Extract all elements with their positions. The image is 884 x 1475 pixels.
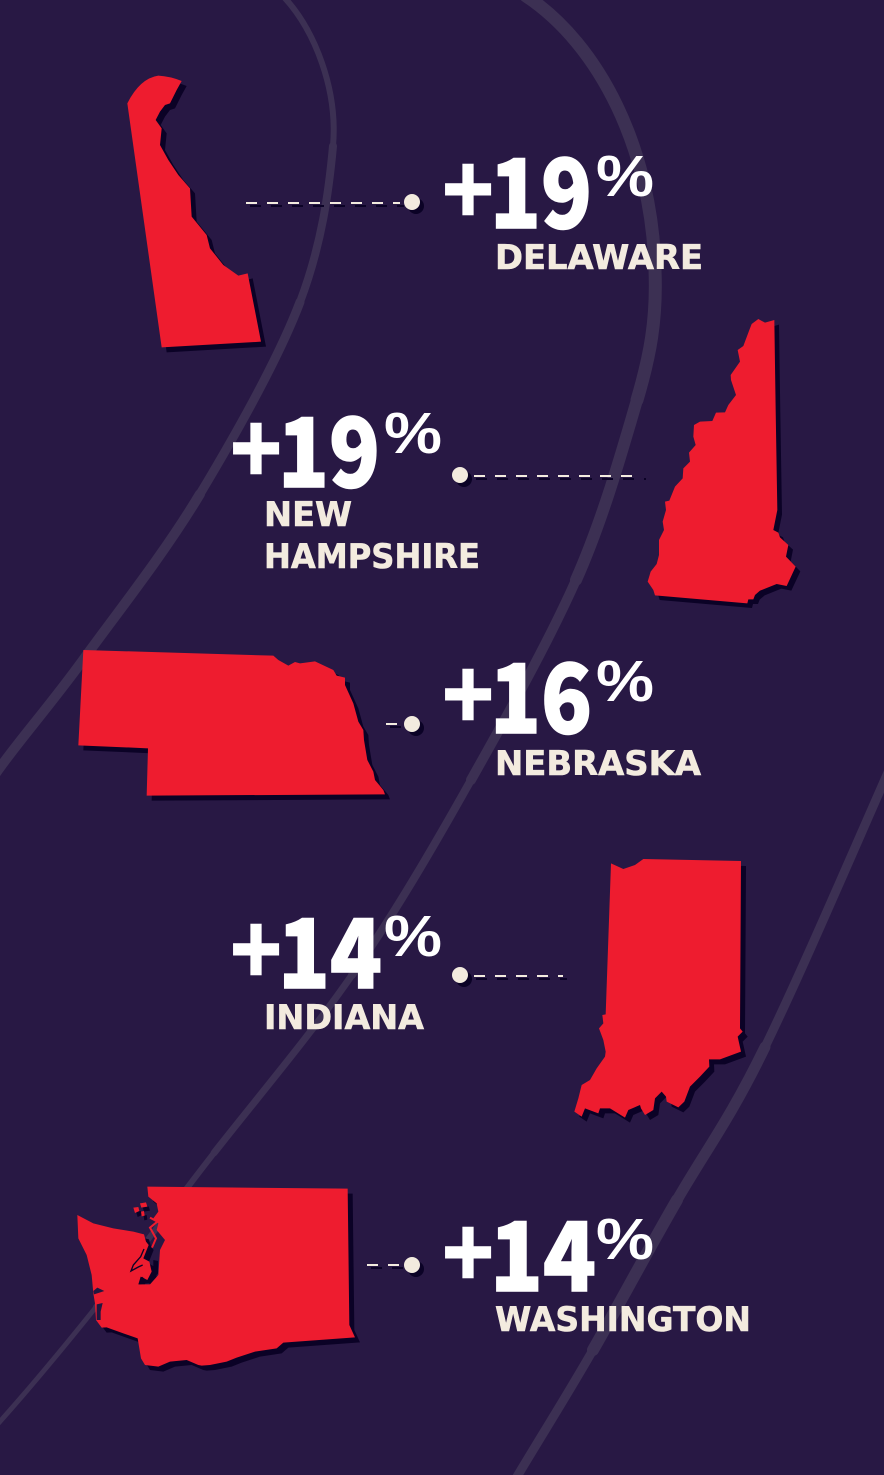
label: Indiana: INDIANA — [264, 998, 425, 1038]
label: Delaware: DELAWARE — [495, 238, 703, 278]
label: Washington: WASHINGTON — [495, 1300, 751, 1340]
connector: Nebraska — [386, 716, 424, 736]
value: +19% Delaware — [442, 117, 654, 256]
panel: Washington — [77, 1180, 751, 1372]
panel: Delaware — [127, 76, 703, 352]
map: New Hampshire — [648, 319, 800, 608]
value: +16% Nebraska: 16 — [490, 622, 592, 761]
value: +19% New Hampshire: 19 — [278, 376, 380, 515]
panel: New Hampshire — [230, 319, 800, 608]
value: +16% Nebraska: + — [442, 638, 494, 748]
value: +14% Washington: 14 — [490, 1180, 596, 1319]
value: +14% Washington: + — [442, 1196, 494, 1306]
value: +14% Indiana: 14 — [278, 877, 382, 1016]
value: +19% New Hampshire — [230, 376, 442, 515]
value: +16% Nebraska — [442, 622, 654, 761]
map: Indiana — [574, 859, 748, 1123]
map: Washington — [77, 1187, 360, 1372]
value: +19% New Hampshire: + — [230, 392, 282, 502]
panel: Nebraska — [78, 622, 702, 801]
connector: Washington — [367, 1257, 424, 1277]
label: New Hampshire — [264, 495, 480, 577]
value: +19% Delaware: 19 — [490, 117, 592, 256]
label: Nebraska: NEBRASKA — [495, 744, 702, 784]
connector: Delaware — [246, 194, 424, 214]
value: +14% Washington: % — [596, 1207, 654, 1272]
panel: Indiana — [230, 859, 748, 1123]
value: +19% Delaware: + — [442, 133, 494, 243]
value: +14% Indiana — [230, 877, 442, 1016]
value: +16% Nebraska: % — [596, 649, 654, 714]
value: +14% Indiana: % — [384, 904, 442, 969]
connector: Indiana — [452, 967, 567, 987]
value: +19% New Hampshire: % — [384, 401, 442, 466]
connector: New Hampshire — [452, 467, 646, 487]
value: +19% Delaware: % — [596, 144, 654, 209]
value: +14% Washington — [442, 1180, 654, 1319]
value: +14% Indiana: + — [230, 893, 282, 1003]
map: Nebraska — [78, 650, 390, 801]
label: New Hampshire: HAMPSHIRE — [264, 537, 480, 577]
map: Delaware — [127, 76, 266, 352]
label: New Hampshire: NEW — [264, 495, 352, 535]
